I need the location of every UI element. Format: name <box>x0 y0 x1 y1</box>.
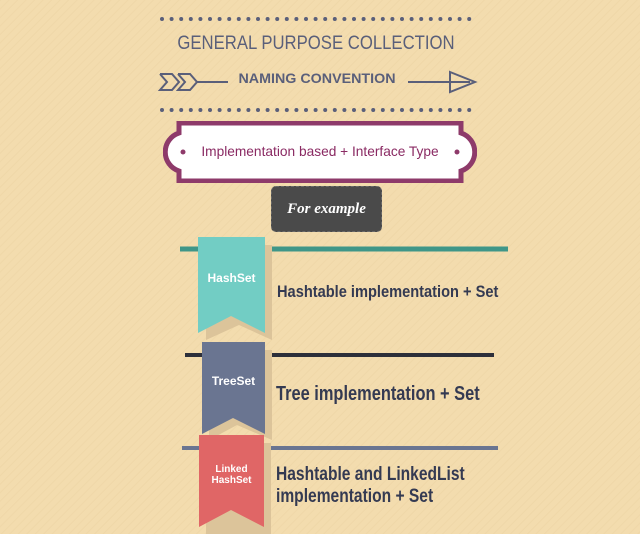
title: GENERAL PURPOSE COLLECTION <box>177 33 455 54</box>
descriptions: Hashtable implementation + Set <box>277 282 498 301</box>
text: Hashtable and LinkedList <box>276 464 465 485</box>
for example badge: For example <box>287 201 366 217</box>
ribbon: HashSet <box>198 237 272 340</box>
text: implementation + Set <box>276 486 433 507</box>
plaque text: Implementation based + Interface Type <box>201 143 439 159</box>
icon: arrow right <box>408 72 475 92</box>
text: Tree implementation + Set <box>276 383 480 405</box>
subtitle: NAMING CONVENTION <box>238 70 396 86</box>
text: HashSet <box>211 475 252 486</box>
text: Linked <box>215 464 248 475</box>
plaque <box>163 121 477 183</box>
icon: chevrons <box>160 74 228 90</box>
ribbon: TreeSet <box>202 342 272 440</box>
text: TreeSet <box>212 374 255 388</box>
ribbon labels: HashSet <box>207 271 256 285</box>
for example badge <box>271 186 382 232</box>
ribbon: LinkedHashSet <box>199 435 271 534</box>
